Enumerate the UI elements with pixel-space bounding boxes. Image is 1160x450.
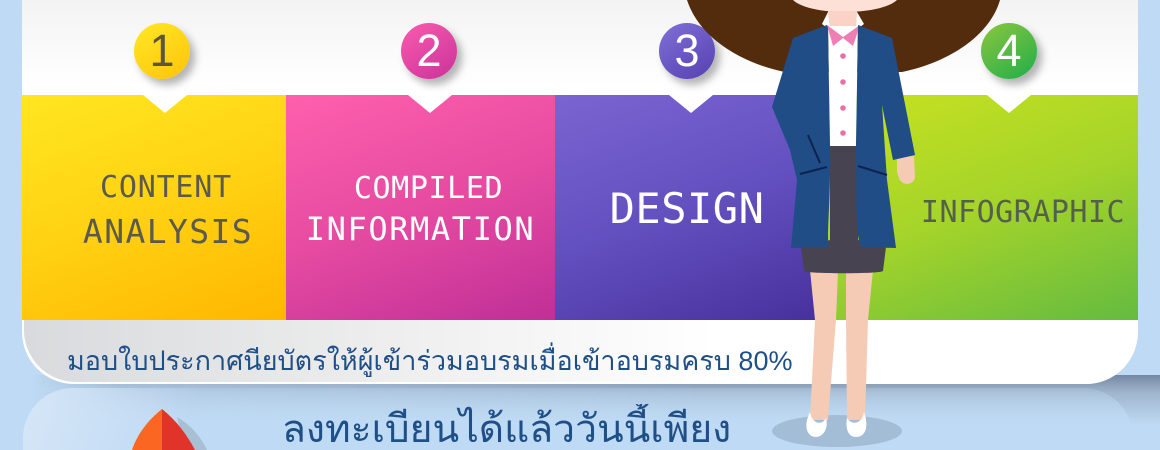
collar (827, 25, 860, 46)
pockets (800, 135, 887, 175)
panel: step 2 compiled information (286, 95, 555, 320)
panel: step 3 design (555, 95, 825, 320)
badge 1 (134, 23, 190, 79)
badge 1: 1 (149, 25, 175, 76)
shoes (806, 412, 827, 437)
label: content analysis: ANALYSIS (83, 212, 253, 251)
skirt (801, 140, 886, 273)
badge 2 (401, 23, 457, 79)
heading: register today: ลงทะเบียนได้แล้ววันนี้เพียง (282, 408, 731, 450)
face and neck (793, 0, 897, 12)
lower panel: registration (23, 388, 1133, 450)
badge 4: 4 (996, 25, 1022, 76)
blazer right (856, 25, 915, 248)
icon: rocket tip (132, 409, 207, 450)
label: infographic: INFOGRAPHIC (921, 195, 1125, 230)
notch 2 (408, 95, 452, 113)
label: content analysis: CONTENT (100, 170, 232, 205)
notch 1 (143, 95, 187, 113)
shirt (828, 26, 858, 146)
badge 3 (659, 23, 715, 79)
label: compiled information (306, 171, 535, 248)
panel: step 1 content analysis (22, 95, 286, 320)
label: compiled information: COMPILED (354, 171, 503, 206)
badge 3: 3 (674, 25, 700, 76)
label: compiled information: INFORMATION (306, 210, 535, 248)
badge 2: 2 (416, 25, 442, 76)
footer note: certificate: มอบใบประกาศนียบัตรให้ผู้เข้าร่วมอบรมเมื่อเข้าอบรมครบ 80% (67, 346, 792, 376)
badge 4 (981, 23, 1037, 79)
label: design: DESIGN (610, 184, 764, 233)
blazer left (772, 25, 830, 248)
notch 4 (987, 95, 1031, 113)
label: content analysis (83, 170, 253, 251)
notch 3 (669, 95, 713, 113)
legs (810, 270, 838, 420)
hair (687, 0, 1000, 72)
ground shadow (772, 415, 902, 447)
floor shadow band (50, 375, 1160, 418)
hand (897, 156, 915, 184)
panel: step 4 infographic (825, 95, 1138, 320)
shirt buttons (840, 53, 846, 136)
